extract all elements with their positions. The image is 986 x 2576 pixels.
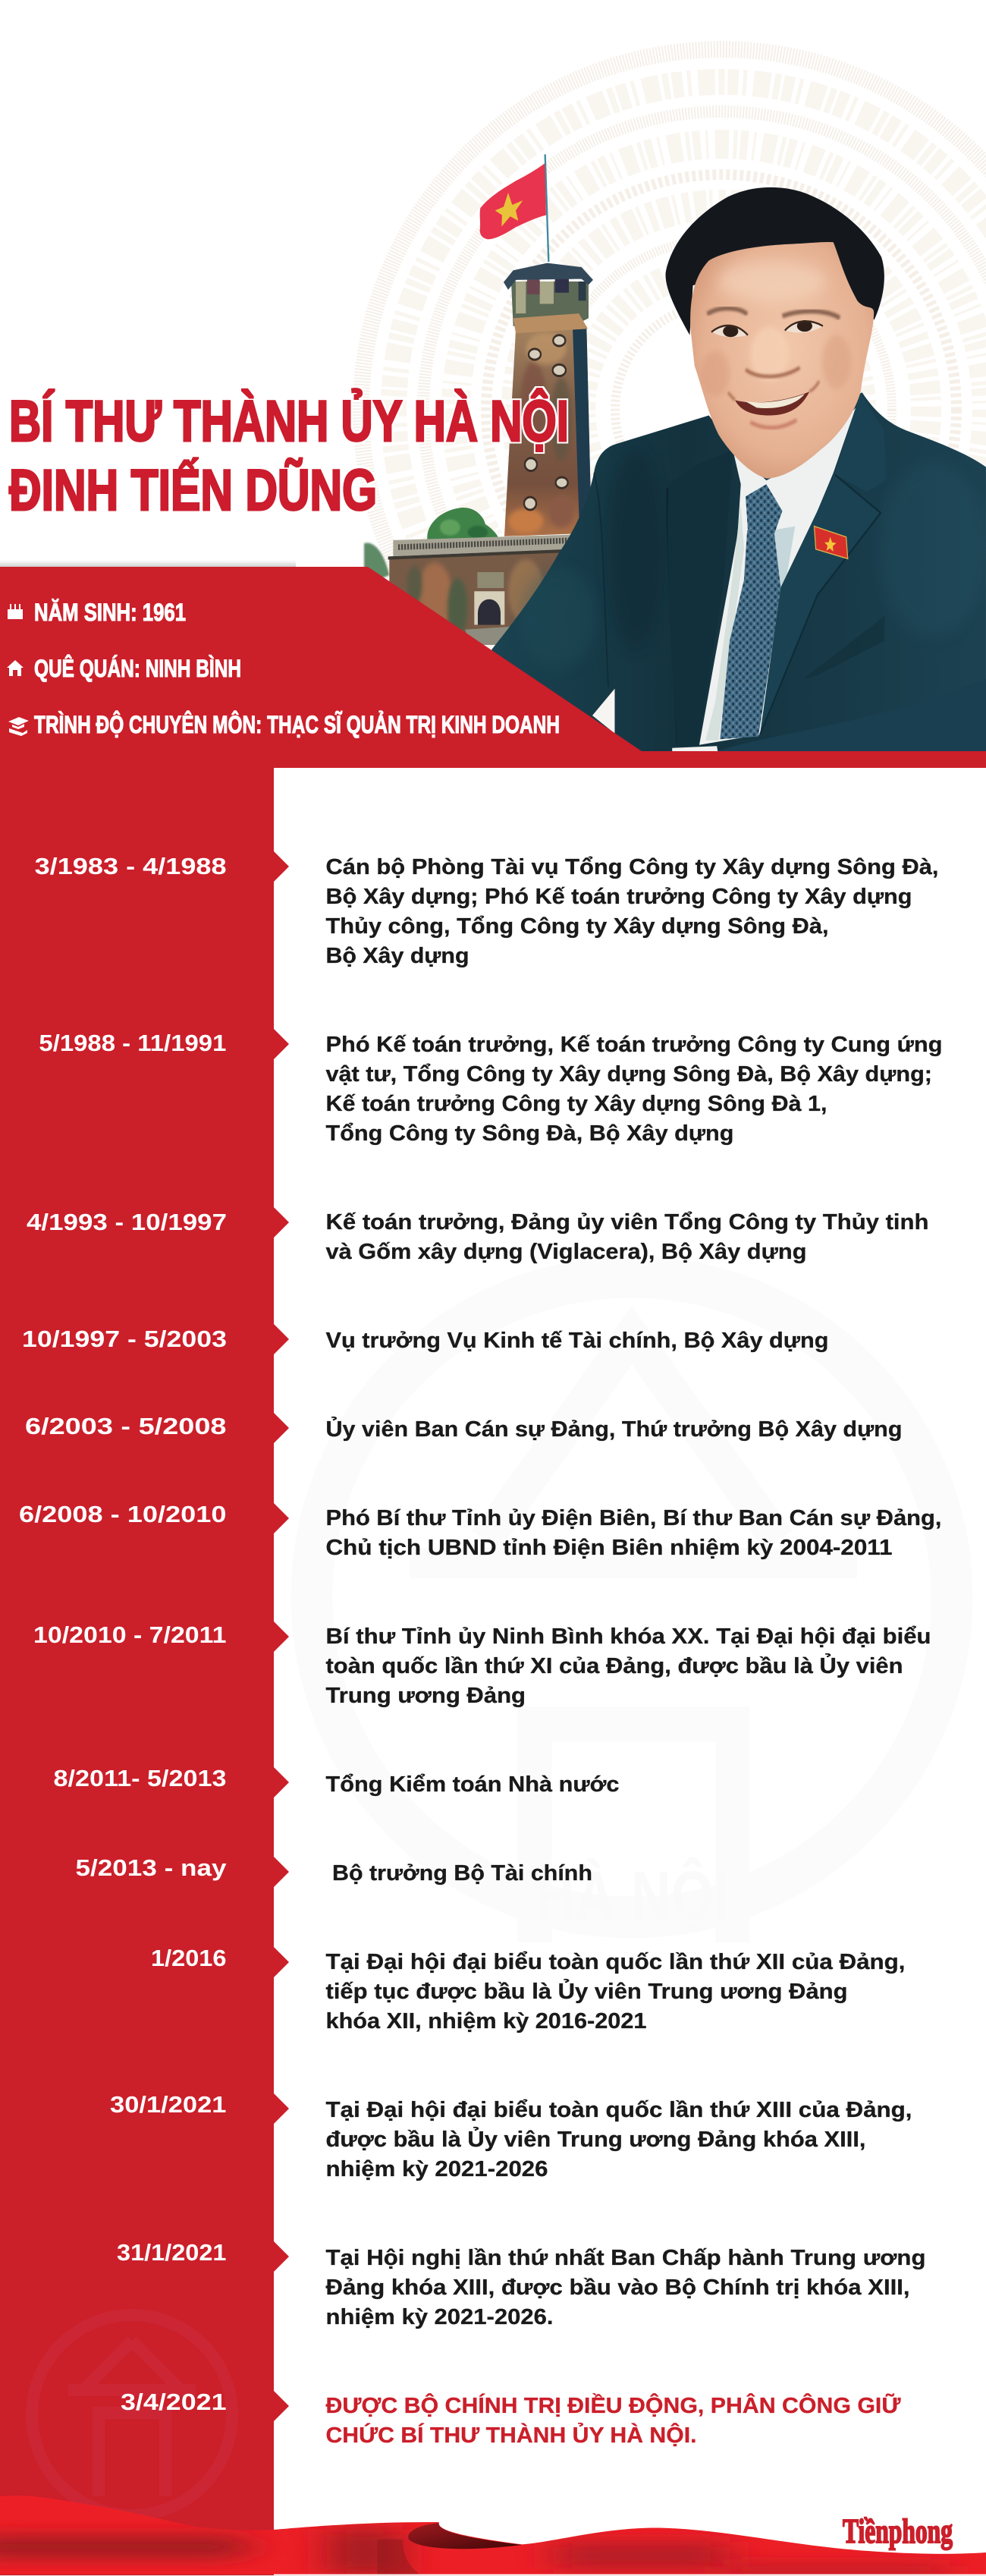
title xyxy=(9,389,569,523)
timeline item 11 xyxy=(110,2091,912,2181)
tower lantern xyxy=(511,282,589,326)
eyebrows xyxy=(708,308,747,314)
timeline item 2: 5/1988 - 11/1991 xyxy=(39,1030,226,1056)
left jacket front xyxy=(667,450,733,746)
icon: graduation cap and books xyxy=(8,717,29,736)
timeline item 5: 6/2003 - 5/2008 xyxy=(25,1413,226,1439)
ribbon fold xyxy=(408,2523,522,2549)
timeline item 2 xyxy=(39,1029,942,1146)
bottom strip xyxy=(0,2575,986,2576)
footer ribbon xyxy=(0,2496,986,2576)
timeline item 6 xyxy=(19,1501,942,1560)
tower roof xyxy=(504,263,593,290)
timeline item 12: Đảng khóa XIII, được bầu vào Bộ Chính trị khóa XIII, xyxy=(326,2276,910,2300)
timeline item 5: Ủy viên Ban Cán sự Đảng, Thứ trưởng Bộ Xây dựng xyxy=(326,1417,903,1442)
icon: cake xyxy=(8,604,23,619)
timeline item 11: Tại Đại hội đại biểu toàn quốc lần thứ XIII của Đảng, xyxy=(326,2098,912,2122)
gap between arm and torso xyxy=(592,689,614,734)
timeline item 10: tiếp tục được bầu là Ủy viên Trung ương Đảng xyxy=(326,1979,848,2004)
timeline item 3: và Gốm xây dựng (Viglacera), Bộ Xây dựng xyxy=(326,1240,807,1264)
timeline item 8: 8/2011- 5/2013 xyxy=(53,1765,226,1791)
timeline item 6: 6/2008 - 10/2010 xyxy=(19,1501,226,1527)
timeline item 2: Phó Kế toán trưởng, Kế toán trưởng Công ty Cung ứng xyxy=(326,1033,942,1057)
timeline item 1: Thủy công, Tổng Công ty Xây dựng Sông Đà, xyxy=(326,914,828,939)
timeline item 2: Tổng Công ty Sông Đà, Bộ Xây dựng xyxy=(326,1121,734,1146)
info: education: TRÌNH ĐỘ CHUYÊN MÔN: THẠC SĨ QUẢN TRỊ KINH DOANH xyxy=(34,711,560,738)
timeline item 6: Chủ tịch UBND tỉnh Điện Biên nhiệm kỳ 2004-2011 xyxy=(326,1536,893,1560)
title: BÍ THƯ THÀNH ỦY HÀ NỘI xyxy=(9,389,569,454)
timeline item 3: Kế toán trưởng, Đảng ủy viên Tổng Công ty Thủy tinh xyxy=(326,1210,928,1235)
timeline item 2: vật tư, Tổng Công ty Xây dựng Sông Đà, Bộ Xây dựng; xyxy=(326,1062,932,1087)
timeline item 4: Vụ trưởng Vụ Kinh tế Tài chính, Bộ Xây dựng xyxy=(326,1329,828,1353)
timeline item 8: Tổng Kiểm toán Nhà nước xyxy=(326,1772,620,1797)
timeline item 12: nhiệm kỳ 2021-2026. xyxy=(326,2305,554,2329)
timeline item 13: ĐƯỢC BỘ CHÍNH TRỊ ĐIỀU ĐỘNG, PHÂN CÔNG GIỮ xyxy=(326,2393,901,2418)
badge: party pin xyxy=(815,527,848,558)
nose shadow xyxy=(746,367,800,376)
timeline item 3 xyxy=(27,1207,928,1264)
timeline item 4: 10/1997 - 5/2003 xyxy=(22,1326,227,1352)
cuff xyxy=(672,746,718,756)
face xyxy=(690,242,874,479)
icon: house xyxy=(7,660,24,676)
timeline item 12: Tại Hội nghị lần thứ nhất Ban Chấp hành Trung ương xyxy=(326,2246,925,2270)
timeline item 1 xyxy=(35,851,939,968)
timeline item 7: Trung ương Đảng xyxy=(326,1684,526,1708)
info: home town: QUÊ QUÁN: NINH BÌNH xyxy=(34,655,241,682)
timeline item 13 xyxy=(121,2389,901,2448)
shirt xyxy=(699,407,856,745)
timeline item 7: Bí thư Tỉnh ủy Ninh Bình khóa XX. Tại Đại hội đại biểu xyxy=(326,1625,931,1649)
timeline item 1: Bộ Xây dựng xyxy=(326,944,469,968)
timeline item 7: toàn quốc lần thứ XI của Đảng, được bầu là Ủy viên xyxy=(326,1653,903,1678)
bronze drum watermark xyxy=(353,41,986,650)
timeline item 10 xyxy=(151,1945,906,2033)
necktie xyxy=(720,484,782,739)
timeline item 10: Tại Đại hội đại biểu toàn quốc lần thứ XII của Đảng, xyxy=(326,1950,906,1974)
illustration: Hanoi Flag Tower xyxy=(364,154,593,645)
timeline item 9: 5/2013 - nay xyxy=(76,1854,227,1881)
city watermark: Hanoi emblem xyxy=(312,1277,952,1942)
info: birth year: NĂM SINH: 1961 xyxy=(34,599,186,626)
jacket pocket xyxy=(803,616,884,679)
timeline item 13: CHỨC BÍ THƯ THÀNH ỦY HÀ NỘI. xyxy=(326,2423,696,2448)
icon: national flag xyxy=(480,163,546,239)
timeline item 5 xyxy=(25,1413,903,1443)
shadow above info panel xyxy=(0,560,296,567)
timeline item 9 xyxy=(76,1854,592,1887)
timeline item 13: 3/4/2021 xyxy=(121,2389,226,2415)
tower portholes xyxy=(524,324,568,510)
timeline item 2: Kế toán trưởng Công ty Xây dựng Sông Đà 1, xyxy=(326,1092,827,1116)
timeline item 1: Cán bộ Phòng Tài vụ Tổng Công ty Xây dựng Sông Đà, xyxy=(326,855,939,879)
icon: left tree xyxy=(364,543,389,585)
timeline item 7 xyxy=(33,1621,931,1708)
timeline item 11: 30/1/2021 xyxy=(110,2091,226,2118)
timeline item 9: Bộ trưởng Bộ Tài chính xyxy=(332,1861,592,1886)
eyes xyxy=(712,326,747,337)
timeline item 11: được bầu là Ủy viên Trung ương Đảng khóa XIII, xyxy=(326,2127,866,2152)
title: ĐINH TIẾN DŨNG xyxy=(9,458,377,523)
timeline item 10: khóa XII, nhiệm kỳ 2016-2021 xyxy=(326,2009,647,2033)
info: home town xyxy=(7,655,241,682)
timeline item 10: 1/2016 xyxy=(151,1945,226,1971)
panel: red sidebar and info block xyxy=(0,567,986,2576)
timeline item 8 xyxy=(53,1765,620,1798)
fortress wall xyxy=(388,534,579,645)
timeline item 6: Phó Bí thư Tỉnh ủy Điện Biên, Bí thư Ban Cán sự Đảng, xyxy=(326,1506,942,1530)
timeline item 12: 31/1/2021 xyxy=(117,2239,226,2266)
suit jacket xyxy=(485,392,986,766)
timeline item 1: Bộ Xây dựng; Phó Kế toán trưởng Công ty Xây dựng xyxy=(326,885,912,909)
timeline item 1: 3/1983 - 4/1988 xyxy=(35,853,227,879)
city watermark: Hanoi emblem: HÀ NỘI xyxy=(535,1857,730,1935)
tower shaft xyxy=(504,326,592,536)
timeline item 7: 10/2010 - 7/2011 xyxy=(33,1621,226,1648)
sidebar emblem watermark xyxy=(32,2315,232,2515)
timeline item 4 xyxy=(22,1324,828,1354)
hair xyxy=(666,187,884,335)
right lapel xyxy=(760,393,886,734)
smile xyxy=(735,392,809,415)
portrait: Đinh Tiến Dũng xyxy=(485,187,986,766)
flag pole xyxy=(545,154,548,262)
sleeve xyxy=(715,679,986,766)
timeline item 11: nhiệm kỳ 2021-2026 xyxy=(326,2157,548,2181)
timeline item 3: 4/1993 - 10/1997 xyxy=(27,1209,227,1235)
icon: green tree xyxy=(427,508,501,543)
timeline item 12 xyxy=(117,2239,925,2329)
